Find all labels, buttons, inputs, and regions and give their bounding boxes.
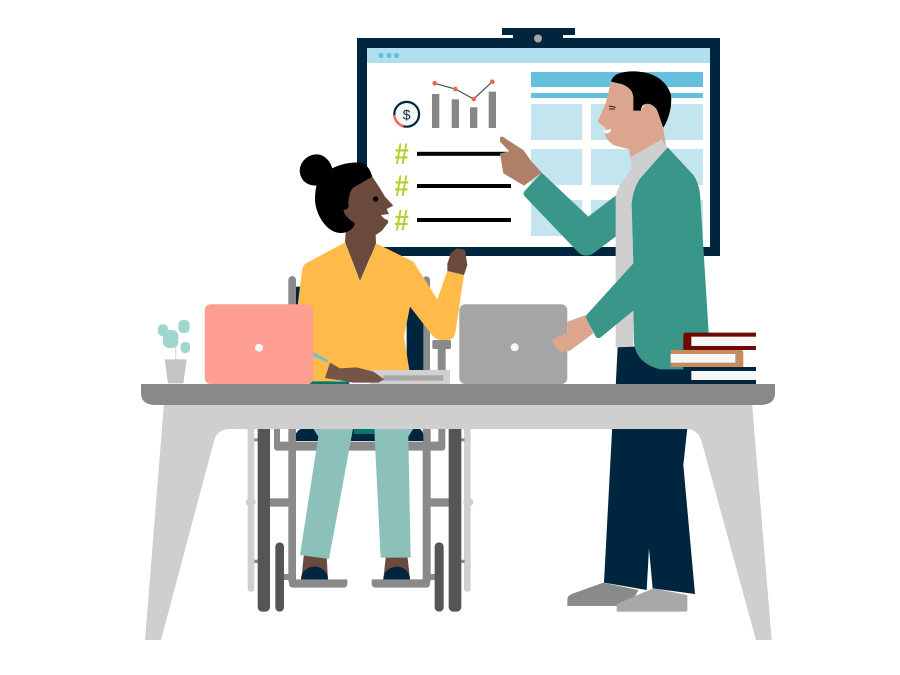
seat cushion	[296, 428, 423, 441]
stack of books	[671, 333, 756, 385]
hash list: #	[394, 204, 409, 237]
desk apron and legs	[145, 403, 772, 640]
hash list	[394, 137, 511, 237]
hand gripping laptop	[551, 315, 593, 353]
pointing hand	[500, 137, 542, 186]
shirt	[616, 139, 667, 347]
neck and face	[335, 177, 393, 281]
data table on screen	[531, 72, 703, 236]
pen, forearm on desk	[309, 352, 450, 384]
woman's yellow top	[297, 242, 467, 382]
desk items	[158, 304, 756, 385]
seated woman	[297, 154, 467, 579]
screen	[367, 48, 710, 247]
webcam	[502, 28, 575, 40]
browser bar	[367, 48, 710, 63]
bar chart	[432, 92, 496, 128]
raised hand	[447, 248, 467, 275]
line chart with markers	[432, 79, 495, 101]
plant	[158, 320, 190, 383]
wheelchair frame and wheels	[246, 420, 473, 612]
hash list: #	[394, 137, 409, 170]
wall monitor	[357, 28, 720, 256]
man's pointing arm	[500, 137, 616, 256]
desk	[141, 384, 775, 640]
webcam lens	[534, 34, 542, 42]
grey laptop	[459, 304, 567, 384]
dollar icon: $	[403, 106, 411, 122]
cardigan	[585, 147, 709, 369]
hash list: #	[394, 169, 409, 202]
notebook	[370, 370, 450, 384]
wheelchair	[246, 276, 473, 612]
hand on desk	[325, 363, 384, 383]
woman's head	[300, 154, 393, 281]
man's torso	[585, 139, 709, 369]
man's trousers	[567, 347, 695, 612]
dollar icon	[394, 102, 419, 127]
woman's legs and shoes	[300, 423, 417, 579]
monitor frame	[357, 38, 720, 256]
shoes	[567, 583, 687, 612]
hair and bun	[300, 154, 372, 233]
desk top	[141, 384, 775, 405]
standing man	[500, 71, 709, 612]
wheelchair backrest posts	[288, 276, 451, 373]
man's head	[598, 71, 671, 158]
pink laptop	[205, 304, 313, 384]
